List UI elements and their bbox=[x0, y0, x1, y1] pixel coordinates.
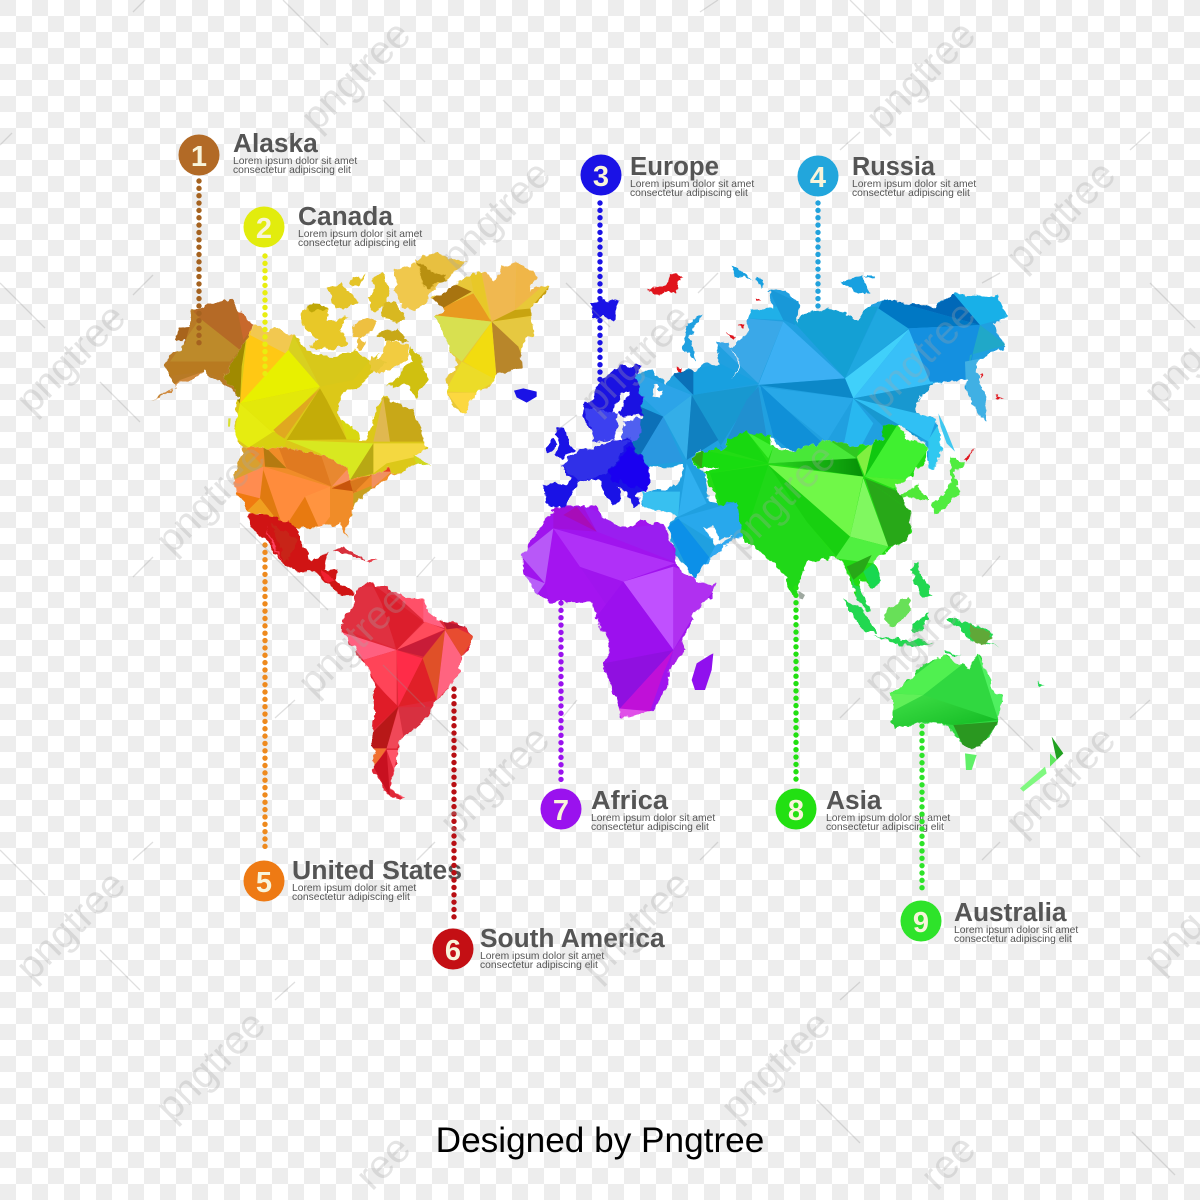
callout 7: Africa bbox=[540, 603, 715, 833]
callout 2: Canada: consectetur adipiscing elit bbox=[298, 238, 416, 249]
callout 4: Russia bbox=[798, 151, 976, 310]
New Zealand bbox=[1020, 737, 1063, 792]
region: United States bbox=[230, 443, 407, 540]
watermark pattern: pngtree bbox=[717, 435, 844, 562]
callout 2: Canada: Lorem ipsum dolor sit amet bbox=[298, 229, 422, 240]
callout 4: Russia: Russia bbox=[852, 151, 935, 181]
callout 3: Europe bbox=[580, 151, 754, 385]
red arctic islands bbox=[648, 275, 1003, 462]
callout 9: Australia: Australia bbox=[954, 897, 1067, 927]
watermark pattern: ree bbox=[912, 1126, 984, 1198]
callout 4: Russia: Lorem ipsum dolor sit amet bbox=[852, 179, 976, 190]
watermark pattern: pngtree bbox=[997, 717, 1124, 844]
callout 5: United States bbox=[244, 545, 462, 903]
callout 6: South America bbox=[432, 689, 665, 971]
Sakhalin bbox=[938, 413, 955, 452]
callout 6: South America: Lorem ipsum dolor sit amet bbox=[480, 951, 604, 962]
callout 9: Australia: consectetur adipiscing elit bbox=[954, 934, 1072, 945]
region: Canada bbox=[220, 253, 467, 483]
region: Alaska bbox=[152, 298, 254, 400]
region: South America bbox=[337, 580, 477, 803]
Svalbard bbox=[589, 298, 618, 322]
Iceland bbox=[514, 388, 537, 403]
callout 1: Alaska: 1 bbox=[191, 141, 207, 173]
watermark pattern: pngtree bbox=[432, 152, 559, 279]
arctic islands bbox=[300, 253, 467, 398]
watermark pattern: pngtree bbox=[997, 152, 1124, 279]
callout 1: Alaska bbox=[178, 128, 357, 345]
callout 1: Alaska: Alaska bbox=[233, 128, 318, 158]
callout 7: Africa: Lorem ipsum dolor sit amet bbox=[591, 813, 715, 824]
footer credit: Designed by Pngtree bbox=[436, 1121, 764, 1160]
region: Asia bbox=[690, 423, 965, 603]
callout 7: Africa: Africa bbox=[591, 785, 668, 815]
watermark pattern: pngtree bbox=[289, 577, 416, 704]
callout 6: South America: 6 bbox=[445, 935, 461, 967]
callout 5: United States: consectetur adipiscing elit bbox=[292, 892, 410, 903]
callout 2: Canada bbox=[244, 201, 422, 375]
callout 4: Russia: 4 bbox=[810, 162, 826, 194]
world map bbox=[140, 253, 1063, 803]
Tasmania bbox=[965, 753, 977, 770]
region: Russia and Middle East bbox=[627, 287, 1013, 583]
callout 2: Canada: 2 bbox=[256, 213, 272, 245]
watermark pattern: pngtree bbox=[147, 1002, 274, 1129]
watermark pattern: pngtree bbox=[431, 717, 558, 844]
watermark pattern: pngtree bbox=[857, 292, 984, 419]
watermark pattern: pngtree bbox=[572, 862, 699, 989]
watermark pattern: pngtree bbox=[857, 12, 984, 139]
Indonesia and Philippines bbox=[843, 562, 1045, 687]
callout 9: Australia: 9 bbox=[913, 907, 929, 939]
callout 6: South America: South America bbox=[480, 923, 665, 953]
watermark pattern: pngtree bbox=[147, 435, 274, 562]
callout 5: United States: Lorem ipsum dolor sit amet bbox=[292, 883, 416, 894]
region: Southeast Asia and Oceania bbox=[843, 562, 1063, 792]
callout 3: Europe: 3 bbox=[593, 161, 609, 193]
watermark pattern: pngtree bbox=[572, 295, 699, 422]
Sri Lanka bbox=[798, 591, 805, 599]
watermark pattern: ree bbox=[347, 1126, 419, 1198]
callout 5: United States: 5 bbox=[256, 867, 272, 899]
callout 3: Europe: Lorem ipsum dolor sit amet bbox=[630, 179, 754, 190]
region: Africa bbox=[520, 503, 720, 723]
callout 8: Asia: consectetur adipiscing elit bbox=[826, 822, 944, 833]
callout 9: Australia: Lorem ipsum dolor sit amet bbox=[954, 925, 1078, 936]
callout 4: Russia: consectetur adipiscing elit bbox=[852, 188, 970, 199]
Japan bbox=[932, 457, 965, 515]
callout 6: South America: consectetur adipiscing elit bbox=[480, 960, 598, 971]
callout 9: Australia bbox=[900, 726, 1078, 945]
callout 1: Alaska: consectetur adipiscing elit bbox=[233, 165, 351, 176]
callout 5: United States: United States bbox=[292, 855, 462, 885]
callout 1: Alaska: Lorem ipsum dolor sit amet bbox=[233, 156, 357, 167]
region: Central America bbox=[247, 513, 378, 597]
watermark pattern: pngtree bbox=[712, 1002, 839, 1129]
callout 3: Europe: consectetur adipiscing elit bbox=[630, 188, 748, 199]
callout 7: Africa: 7 bbox=[553, 795, 569, 827]
watermark pattern: pngtree bbox=[7, 295, 134, 422]
Australia bbox=[887, 650, 1007, 750]
callout 7: Africa: consectetur adipiscing elit bbox=[591, 822, 709, 833]
British Isles bbox=[544, 425, 576, 459]
watermark pattern: pngtree bbox=[7, 862, 134, 989]
watermark pattern: pngtree bbox=[292, 12, 419, 139]
callout 2: Canada: Canada bbox=[298, 201, 393, 231]
callout 8: Asia: Asia bbox=[826, 785, 882, 815]
watermark pattern: pngtree bbox=[855, 577, 982, 704]
Madagascar bbox=[692, 653, 713, 690]
Arctic islands, blue bbox=[732, 265, 875, 295]
region: Greenland bbox=[430, 262, 550, 414]
callout 8: Asia: 8 bbox=[788, 795, 804, 827]
callout 8: Asia bbox=[776, 588, 950, 833]
region: Europe bbox=[544, 265, 1003, 508]
callout 8: Asia: Lorem ipsum dolor sit amet bbox=[826, 813, 950, 824]
callout 3: Europe: Europe bbox=[630, 151, 719, 181]
